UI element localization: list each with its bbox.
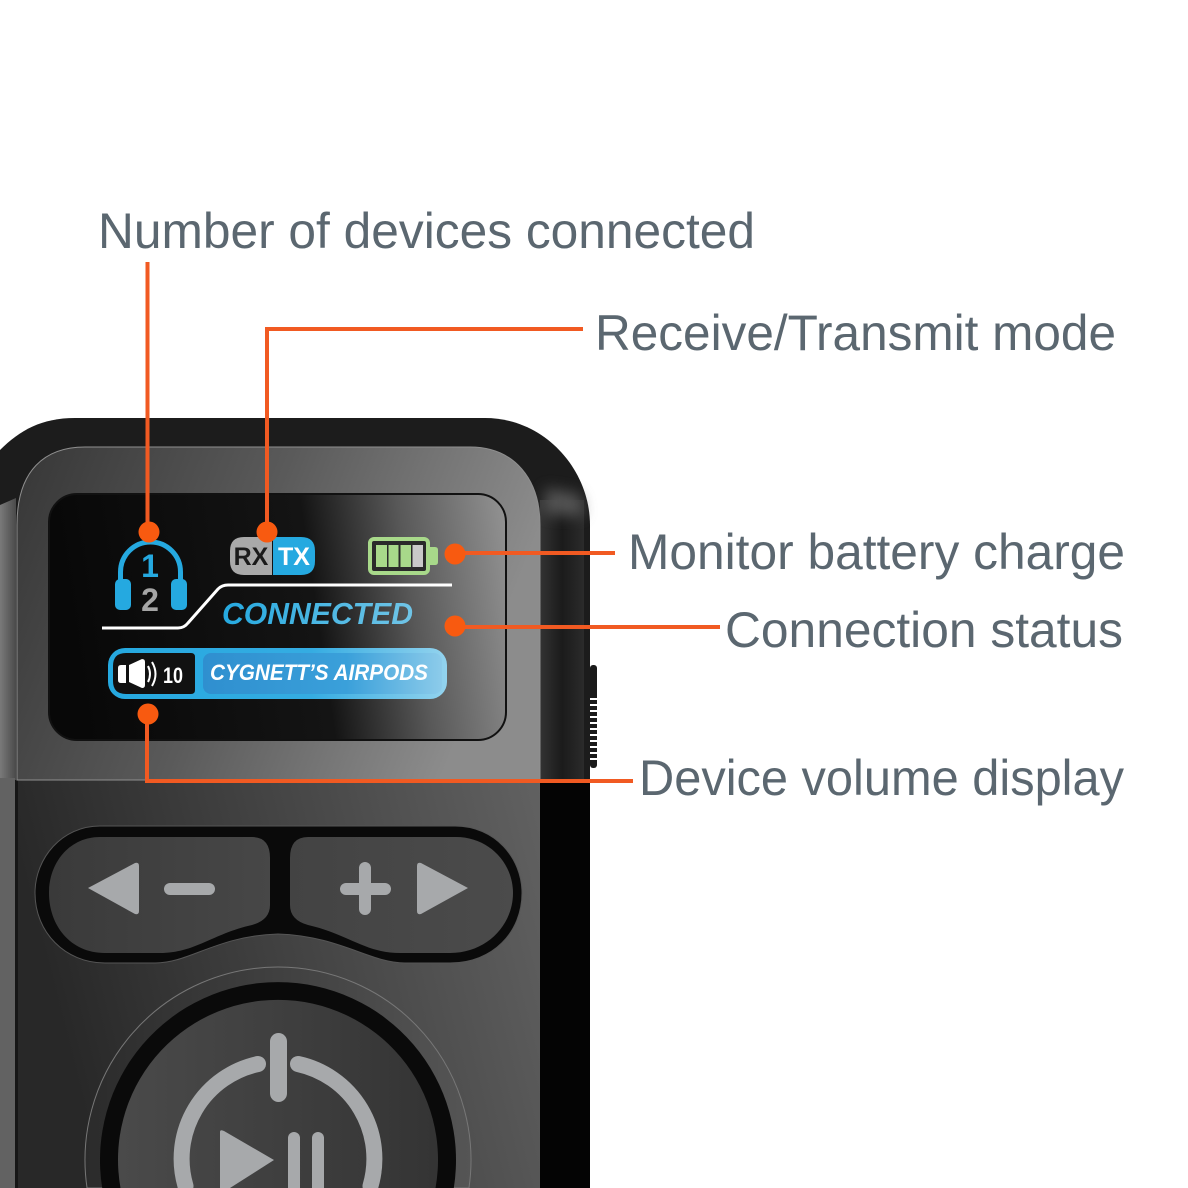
callout: device volume: Device volume display <box>639 750 1124 806</box>
icon: RX TX badge <box>230 537 315 575</box>
volume and device name bar: 10 <box>163 663 183 688</box>
icon: RX TX badge: TX <box>278 543 310 571</box>
connected status text: CONNECTED <box>222 596 413 631</box>
volume and device name bar <box>108 648 447 699</box>
icon: speaker <box>118 659 156 688</box>
screen divider line <box>102 585 452 628</box>
icon: play <box>220 1130 274 1188</box>
display screen <box>49 494 506 740</box>
callout: receive transmit mode: Receive/Transmit mode <box>595 305 1116 361</box>
upper body panel <box>17 447 540 780</box>
icon: headphones with device numbers <box>115 542 187 618</box>
icon: power bar <box>270 1033 287 1102</box>
callout: number of devices: Number of devices connected <box>98 203 755 259</box>
icon: headphones with device numbers: 1 <box>141 548 159 584</box>
callout: connection status <box>444 602 1123 658</box>
icon: headphones with device numbers: 2 <box>141 582 159 618</box>
device body <box>0 418 590 1188</box>
icon: RX TX badge: RX <box>234 543 269 571</box>
callout: number of devices <box>98 203 755 542</box>
icon: battery <box>370 539 438 573</box>
next / volume up button <box>290 837 513 953</box>
lower body panel <box>18 780 540 1188</box>
icon: power ring <box>182 1064 374 1186</box>
side grip button <box>590 665 597 768</box>
callout: connection status: Connection status <box>725 602 1123 658</box>
volume and device name bar: CYGNETT’S AIRPODS <box>210 660 428 685</box>
left and right button housing <box>35 826 522 963</box>
previous / volume down button <box>49 837 270 953</box>
callout: receive transmit mode <box>256 305 1116 542</box>
callout: battery charge: Monitor battery charge <box>628 524 1125 580</box>
power and play button <box>85 967 471 1188</box>
icon: pause <box>288 1132 324 1188</box>
callout: device volume <box>138 704 1124 806</box>
